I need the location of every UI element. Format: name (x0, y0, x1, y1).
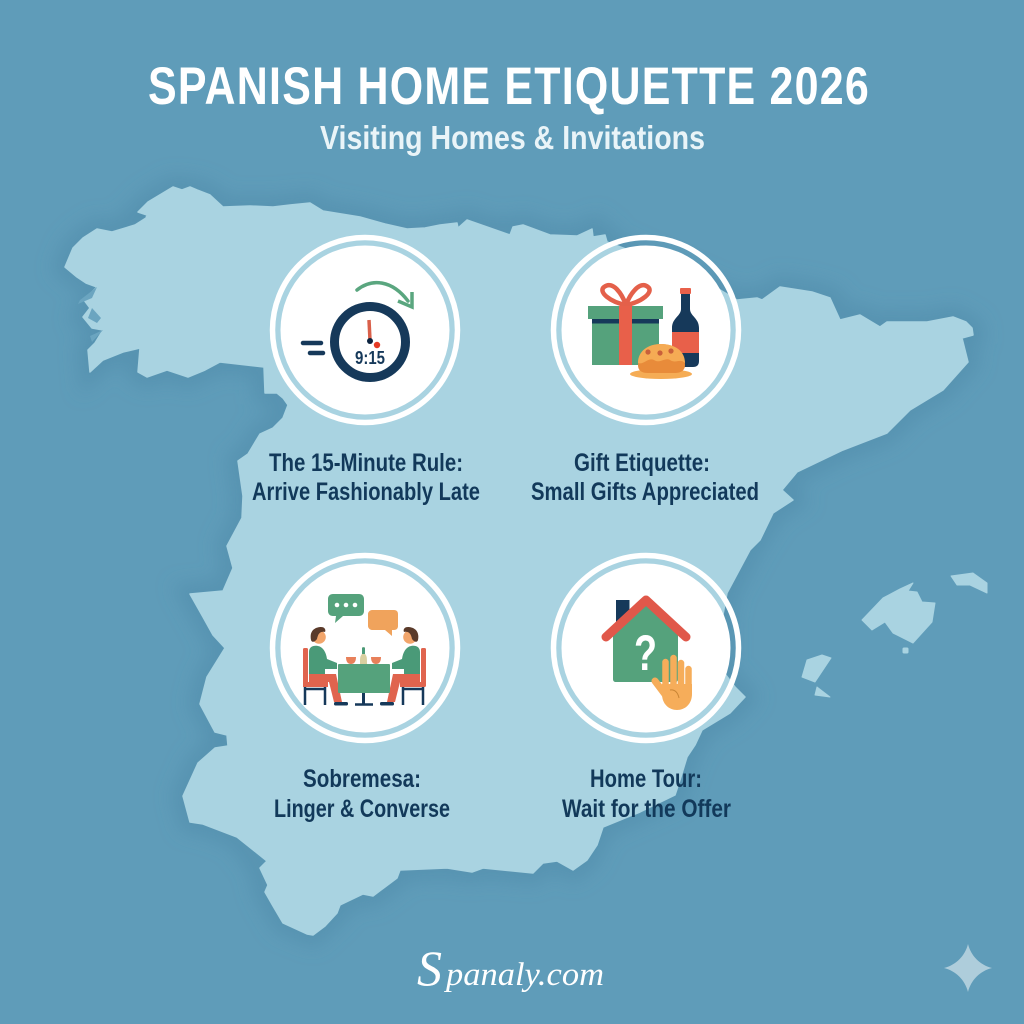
label: The 15-Minute Rule: (269, 449, 463, 477)
badge (554, 556, 738, 740)
title: SPANISH HOME ETIQUETTE 2026 (148, 57, 870, 116)
panel: sobremesa (272, 556, 458, 823)
speech bubbles (328, 594, 398, 636)
label (274, 765, 450, 823)
icon: gift box, wine bottle and pastry (588, 285, 699, 379)
subtitle: Visiting Homes & Invitations (320, 119, 705, 156)
label (562, 765, 731, 823)
estuaries (78, 287, 103, 342)
brand footer: panaly.com (444, 957, 604, 993)
label: Gift Etiquette: (574, 449, 710, 477)
icon: clock: 9:15 (355, 348, 385, 368)
raised hand (655, 658, 692, 710)
map of Spain (65, 187, 987, 935)
brand footer (417, 940, 604, 996)
badge (272, 238, 458, 422)
label: Small Gifts Appreciated (531, 478, 759, 506)
badge (272, 556, 458, 740)
label: Linger & Converse (274, 795, 450, 823)
panel: home tour (554, 556, 738, 823)
icon: clock (303, 283, 412, 378)
badge (554, 238, 738, 422)
label: Arrive Fashionably Late (252, 478, 480, 506)
Balearic islands (802, 573, 987, 697)
label (531, 449, 759, 506)
brand footer: S (417, 940, 442, 996)
panel: gift etiquette (531, 238, 759, 506)
icon: two people talking at a table (303, 594, 426, 706)
table (338, 647, 390, 704)
icon: sparkle (944, 944, 992, 992)
label: Wait for the Offer (562, 795, 731, 823)
icon: house with question mark and raised hand: ? (634, 625, 657, 681)
chairs (303, 648, 426, 705)
people (309, 627, 420, 706)
panel: the 15-minute rule (252, 238, 480, 506)
label: Home Tour: (590, 765, 702, 793)
icon: house with question mark and raised hand (606, 600, 692, 710)
label: Sobremesa: (303, 765, 421, 793)
label (252, 449, 480, 506)
